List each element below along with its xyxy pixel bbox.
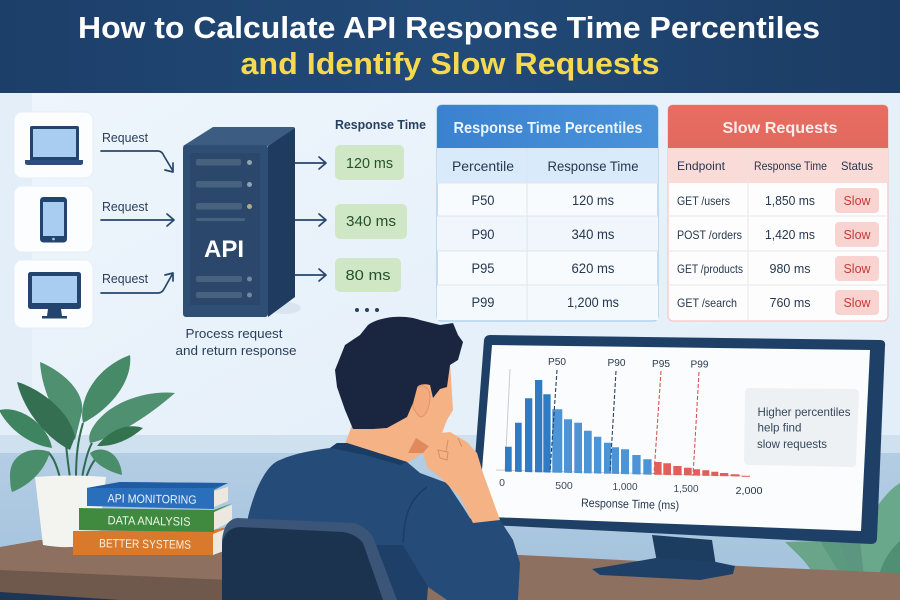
icon: desktop monitor	[14, 260, 93, 328]
request labels	[102, 131, 149, 286]
panel: client devices	[14, 112, 93, 328]
panel: response time percentiles table: P99	[472, 295, 494, 310]
panel: response time percentiles table: P50	[472, 193, 494, 208]
x axis labels: Response Time (ms)	[581, 496, 679, 512]
status badges: Slow	[844, 227, 871, 242]
ear	[413, 386, 430, 417]
callout: higher percentiles: slow requests	[757, 437, 827, 451]
book: data analysis	[79, 503, 233, 532]
panel: response time percentiles table: 120 ms	[572, 193, 614, 208]
server caption: and return response	[176, 343, 296, 358]
value: 80 ms	[335, 258, 401, 292]
plant on right behind monitor	[785, 483, 900, 576]
monitor stand	[592, 535, 735, 580]
leaves	[0, 355, 175, 492]
histogram	[496, 369, 750, 477]
neck shadow	[408, 438, 430, 453]
monitor screen	[482, 345, 870, 531]
desk gap	[427, 587, 447, 600]
server caption	[176, 326, 296, 358]
book: data analysis: DATA ANALYSIS	[107, 513, 191, 529]
value: 340 ms: 340 ms	[346, 214, 396, 230]
percentile markers: P99	[690, 360, 709, 370]
hair	[335, 317, 463, 429]
panel: response time percentiles table: Percentile	[452, 159, 514, 174]
panel: response time percentiles table: 340 ms	[572, 227, 615, 242]
x axis labels: 2,000	[736, 485, 763, 497]
panel: slow requests table: GET /search	[677, 296, 737, 310]
panel: slow requests table	[668, 105, 888, 321]
request arrows	[101, 151, 174, 293]
response arrows	[295, 157, 326, 281]
API server	[183, 127, 301, 317]
title banner	[0, 0, 900, 93]
panel: slow requests table: GET /products	[677, 262, 743, 276]
panel: response time percentiles table: P90	[472, 227, 494, 242]
x axis labels: 1,000	[612, 481, 638, 493]
status badges: Slow	[844, 295, 871, 310]
icon: laptop	[14, 112, 93, 178]
chair back	[222, 518, 397, 600]
heading: response time: Response Time	[335, 118, 426, 132]
book stack	[73, 482, 233, 555]
request labels: Request	[102, 272, 149, 286]
panel: slow requests table: POST /orders	[677, 228, 742, 242]
panel: slow requests table: 760 ms	[770, 295, 811, 310]
monitor with chart	[470, 335, 885, 580]
status badges: Slow	[844, 261, 871, 276]
pot	[35, 476, 106, 547]
book: better systems: BETTER SYSTEMS	[99, 536, 191, 552]
panel: response time percentiles table: 620 ms	[572, 261, 615, 276]
potted plant	[0, 355, 175, 547]
response time column	[335, 118, 426, 312]
book: better systems	[73, 526, 232, 555]
status badges: Slow	[844, 193, 871, 208]
hand and forearm	[423, 432, 500, 523]
panel: slow requests table: 980 ms	[770, 261, 811, 276]
value: 340 ms	[335, 204, 407, 239]
collar	[330, 443, 407, 465]
request labels: Request	[102, 200, 149, 214]
panel: slow requests table: 1,850 ms	[765, 193, 815, 208]
panel: slow requests table: Slow Requests	[722, 120, 838, 137]
panel: response time percentiles table: P95	[472, 261, 494, 276]
value: 80 ms: 80 ms	[346, 268, 390, 284]
status badges	[835, 188, 879, 315]
shirt body	[248, 443, 520, 600]
x axis labels: 0	[499, 477, 505, 489]
panel: response time percentiles table	[437, 105, 658, 321]
callout: higher percentiles: Higher percentiles	[758, 405, 850, 419]
book: api monitoring: API MONITORING	[107, 491, 197, 507]
percentile markers: P95	[652, 359, 670, 370]
person viewing chart	[222, 317, 520, 600]
percentile markers	[548, 357, 709, 476]
sleeve seam	[403, 487, 427, 543]
percentile markers: P50	[548, 357, 566, 368]
ellipsis dots	[355, 308, 379, 312]
book: api monitoring	[87, 482, 228, 509]
panel: slow requests table: GET /users	[677, 194, 730, 208]
panel: slow requests table: 1,420 ms	[765, 227, 815, 242]
API server: API	[204, 236, 244, 263]
panel: slow requests table: Endpoint	[677, 159, 726, 173]
x axis labels	[499, 477, 763, 512]
value: 120 ms	[335, 145, 404, 180]
panel: response time percentiles table: 1,200 ms	[567, 295, 619, 310]
callout: higher percentiles	[744, 388, 859, 467]
panel: slow requests table: Status	[841, 159, 873, 173]
desk	[0, 540, 900, 600]
monitor frame	[470, 335, 885, 544]
x axis labels: 500	[555, 480, 573, 492]
panel: slow requests table: Response Time	[754, 159, 827, 173]
server caption: Process request	[186, 326, 283, 341]
under arm shadow	[375, 545, 428, 600]
panel: response time percentiles table: Response Time	[548, 159, 638, 174]
title banner: and Identify Slow Requests	[240, 46, 660, 81]
request labels: Request	[102, 131, 149, 145]
finger lines	[438, 438, 462, 460]
icon: tablet	[14, 186, 93, 252]
panel: response time percentiles table: Response Time Percentiles	[454, 120, 642, 137]
neck and face	[345, 360, 453, 464]
percentile markers: P90	[608, 358, 626, 369]
chair front	[222, 527, 383, 600]
x axis labels: 1,500	[674, 483, 699, 495]
title banner: How to Calculate API Response Time Percentiles	[78, 10, 820, 45]
callout: higher percentiles: help find	[758, 420, 802, 434]
value: 120 ms: 120 ms	[346, 156, 393, 172]
